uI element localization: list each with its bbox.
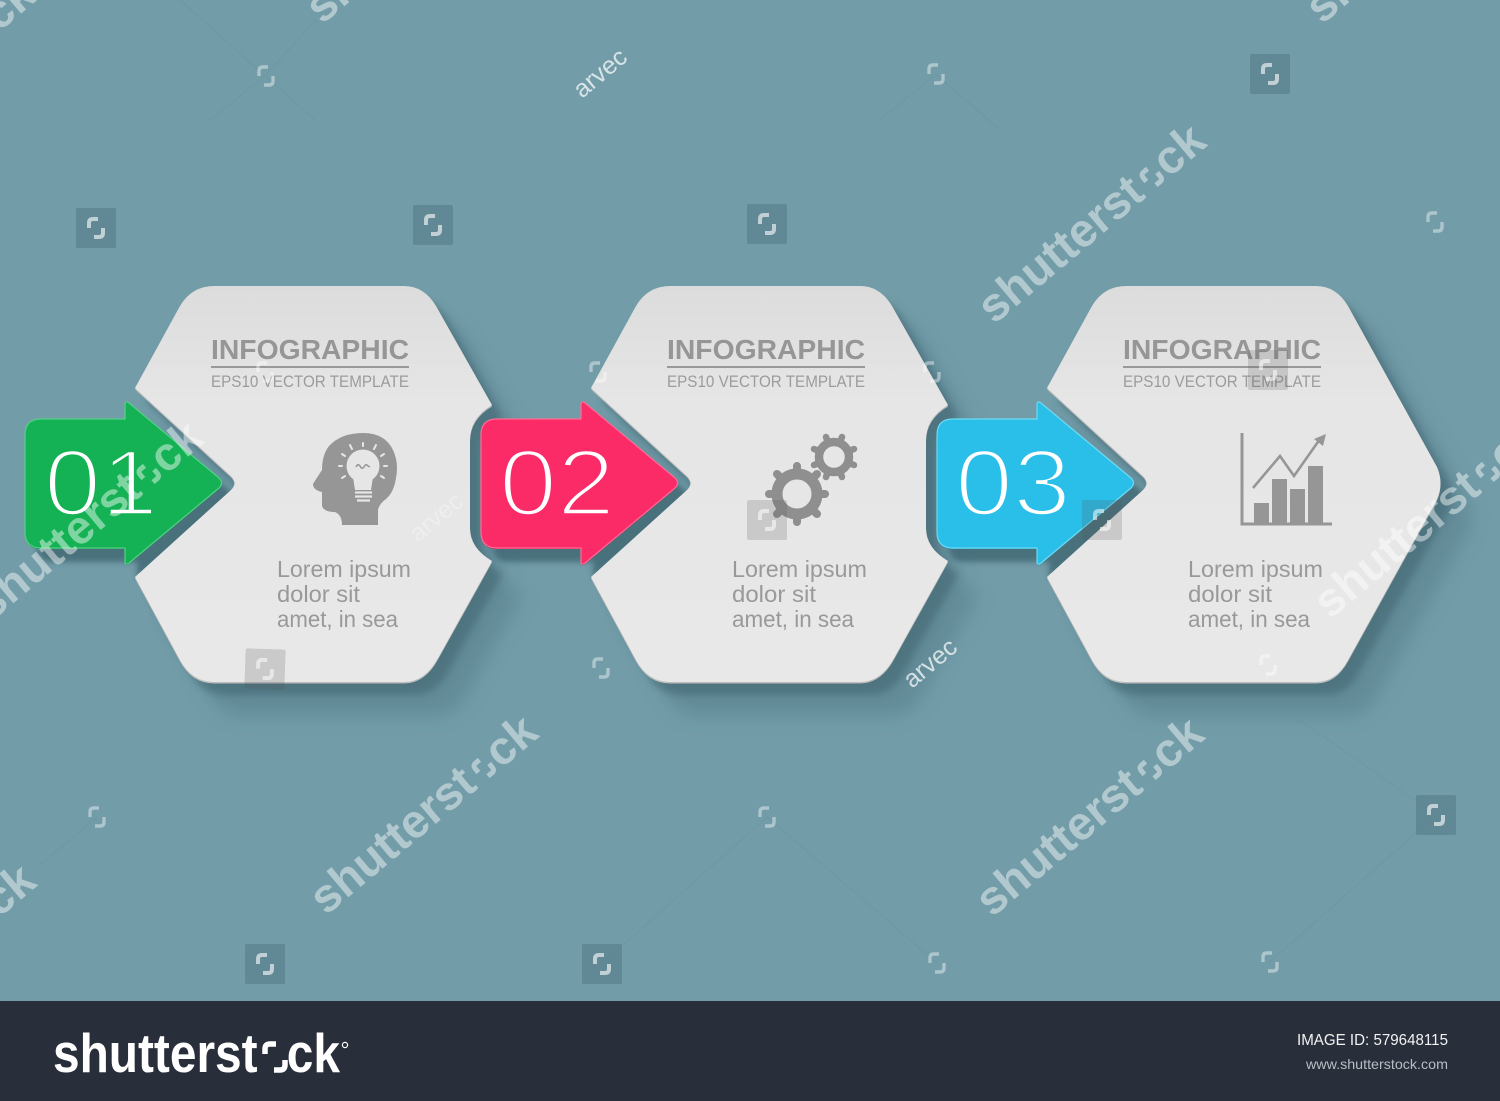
- arrow: step 01: [25, 402, 222, 565]
- watermarks: small outline logos: [90, 65, 1442, 972]
- body text: Lorem ipsum: [732, 556, 867, 582]
- arrow: step 03: [937, 402, 1134, 565]
- body text: [277, 556, 411, 632]
- heading: INFOGRAPHIC: [667, 334, 865, 365]
- watermarks: text: shutterstock: [966, 112, 1216, 333]
- shadow: card 1 near: [146, 299, 503, 695]
- footer bar: [0, 1001, 1500, 1101]
- watermarks: text: shutterstock: [298, 703, 548, 924]
- website: www.shutterstock.com: [1305, 1056, 1448, 1072]
- shadow: card 2 near: [602, 299, 959, 695]
- subheading: EPS10 VECTOR TEMPLATE: [211, 373, 409, 391]
- body text: [1188, 556, 1323, 632]
- subheading: EPS10 VECTOR TEMPLATE: [667, 373, 865, 391]
- heading rule: [211, 366, 409, 368]
- watermarks: text: arvec: [898, 633, 963, 694]
- shadow: card 3 far: [1077, 320, 1470, 716]
- heading: INFOGRAPHIC: [1123, 334, 1321, 365]
- body text: Lorem ipsum: [277, 556, 411, 582]
- shadow: arrow 2: [493, 416, 690, 578]
- watermarks: logo squares: [76, 54, 1456, 984]
- image id: IMAGE ID: 579648115: [1297, 1032, 1448, 1049]
- shadow: card 1 far: [165, 320, 522, 716]
- heading: INFOGRAPHIC: [211, 334, 409, 365]
- heading rule: [1123, 366, 1321, 368]
- heading rule: [667, 366, 865, 368]
- body text: dolor sit: [1188, 581, 1273, 607]
- subheading: EPS10 VECTOR TEMPLATE: [1123, 373, 1321, 391]
- body text: dolor sit: [732, 581, 817, 607]
- icon: head with light bulb: [313, 433, 397, 525]
- watermarks: text: shutterstock: [964, 705, 1214, 926]
- body text: amet, in sea: [732, 606, 854, 632]
- panel: step 1 card: [135, 286, 492, 684]
- shadow: card 3 near: [1058, 299, 1452, 695]
- icon: gears: [769, 437, 854, 522]
- long shadows: [37, 299, 1470, 716]
- panel: step 3 card: [1047, 286, 1440, 684]
- body text: amet, in sea: [1188, 606, 1310, 632]
- shadow: arrow 1: [37, 416, 234, 578]
- number 03: 03: [955, 430, 1071, 535]
- watermarks: text: arvec: [404, 487, 469, 548]
- shadow: arrow 3: [949, 416, 1146, 578]
- watermarks: text: arvec: [568, 43, 633, 104]
- arrow: step 02: [481, 402, 678, 565]
- number 01: 01: [44, 430, 158, 535]
- body text: [732, 556, 867, 632]
- shadow: card 2 far: [621, 320, 978, 716]
- body text: amet, in sea: [277, 606, 398, 632]
- panel: step 2 card: [591, 286, 948, 684]
- number 02: 02: [499, 430, 615, 535]
- footer logo: shutterstock: [53, 1022, 340, 1084]
- icon: bar chart with arrow: [1242, 433, 1332, 524]
- body text: Lorem ipsum: [1188, 556, 1323, 582]
- body text: dolor sit: [277, 581, 361, 607]
